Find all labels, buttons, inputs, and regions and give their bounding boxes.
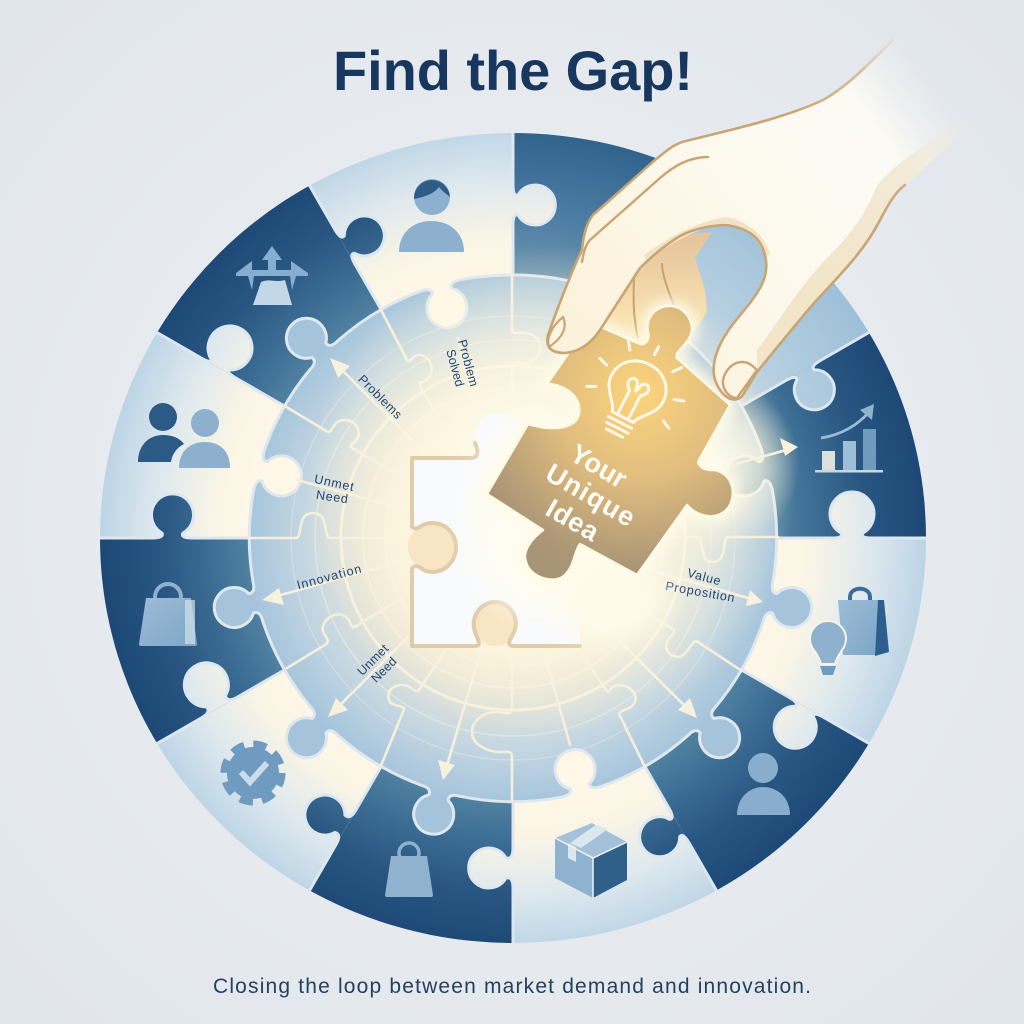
arrow: problems	[330, 358, 425, 453]
slot highlight	[470, 425, 610, 615]
inner ring of puzzle pieces	[214, 275, 812, 834]
idea puzzle piece	[487, 306, 733, 580]
icon: light bulb	[573, 325, 700, 454]
seam: bottom left	[304, 768, 382, 891]
seam: left	[83, 494, 248, 538]
label: unmet need lower: Unmet	[355, 641, 392, 678]
piece label: your unique idea: Your	[565, 438, 632, 494]
idea piece glow	[487, 306, 733, 580]
piece: growth chart	[728, 332, 926, 537]
seam: top	[513, 108, 555, 275]
hand	[547, 35, 980, 400]
piece label: your unique idea: Unique	[541, 458, 640, 533]
seam: left upper	[156, 324, 284, 406]
radial arrows	[262, 358, 763, 780]
thumbnail	[723, 362, 757, 398]
icon: growth chart	[815, 404, 883, 472]
piece: shopping bag	[100, 538, 283, 744]
caption: Closing the loop between market demand and innovation.	[213, 975, 811, 998]
arrow: to chart	[732, 438, 798, 465]
piece: small bag	[310, 768, 512, 943]
concentric ripple rings	[291, 316, 735, 760]
label: value proposition: Proposition	[664, 579, 736, 605]
seams with puzzle knobs	[83, 108, 943, 968]
lower right glow	[560, 558, 664, 642]
label: problems: Problems	[355, 372, 405, 422]
puzzle wheel: outer ring	[100, 133, 926, 943]
seam: left lower	[156, 661, 284, 744]
piece label: your unique idea: Idea	[541, 493, 605, 548]
title: Find the Gap!	[333, 39, 693, 102]
icon: bulb and bag	[810, 589, 889, 675]
arrow: unmet need lower	[328, 638, 407, 717]
icon: two people	[138, 403, 230, 468]
finger crease	[582, 157, 708, 262]
piece: person	[310, 133, 512, 326]
piece: behind the hand	[690, 226, 869, 404]
seam: right lower	[742, 670, 870, 750]
label: unmet need upper: Unmet	[313, 472, 356, 494]
hand inner crease shading	[645, 220, 767, 258]
label: value proposition	[664, 566, 736, 605]
label: unmet need lower: Need	[368, 654, 400, 686]
icon: person	[399, 179, 464, 252]
piece: top right dark	[514, 133, 656, 280]
ring labels	[295, 338, 736, 686]
arrow: innovation	[262, 558, 413, 605]
label: unmet need upper: Need	[315, 488, 349, 506]
right side glow	[630, 380, 800, 550]
central glow	[305, 245, 795, 735]
seam: bottom right	[638, 767, 718, 891]
label: unmet need upper	[313, 472, 356, 506]
icon: shopping bag	[139, 584, 197, 646]
slot outline	[412, 443, 580, 646]
label: value proposition: Value	[686, 566, 722, 588]
piece label: your unique idea	[541, 438, 640, 548]
hand shading band	[757, 118, 980, 372]
seam: right	[778, 492, 943, 538]
seam: bottom	[469, 803, 513, 968]
icon: small bag	[385, 843, 433, 897]
arrow: bottom	[438, 627, 488, 780]
label: problem solved: Problem	[455, 338, 481, 388]
hand outline	[547, 40, 905, 400]
piece: gear	[157, 672, 379, 890]
piece: box	[513, 751, 716, 943]
seam: top left	[306, 180, 384, 308]
piece: bulb and bag	[744, 540, 926, 743]
label: problem solved: Solved	[443, 348, 467, 388]
piece: two people	[100, 333, 300, 536]
warm tabs inside slot	[408, 523, 517, 646]
piece: arrows	[157, 186, 379, 404]
piece: customer	[647, 672, 869, 890]
seam: right upper	[742, 332, 870, 412]
icon: check gear	[225, 745, 281, 801]
label: unmet need lower	[355, 641, 400, 686]
arrow: value proposition	[643, 568, 763, 606]
empty puzzle slot	[412, 413, 580, 646]
hand: fingers behind puzzle piece	[600, 232, 712, 345]
icon: arrows over trapezoid	[236, 246, 308, 305]
index fingernail	[548, 317, 565, 347]
icon: customer	[737, 753, 790, 815]
label: innovation: Innovation	[295, 562, 363, 592]
inner piece seams	[248, 275, 778, 800]
label: problem solved	[443, 338, 481, 388]
icon: parcel box	[555, 823, 627, 898]
arrow: lower right	[583, 605, 697, 718]
